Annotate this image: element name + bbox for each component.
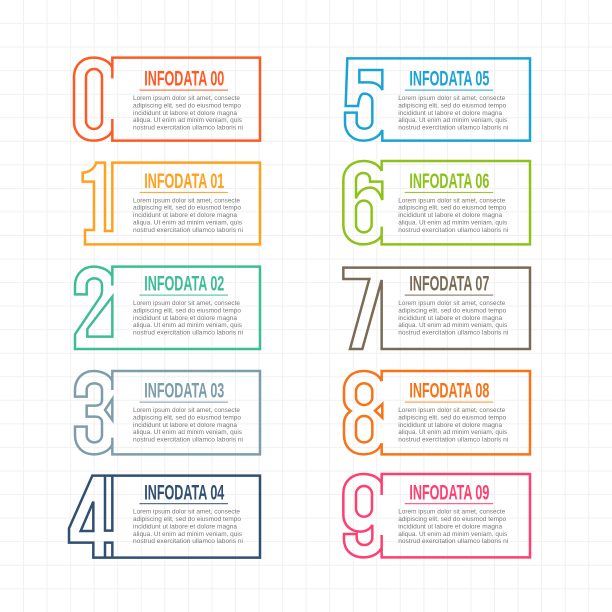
text: infodata 08: nostrud exercitation ullamco laboris ni — [398, 437, 509, 444]
number 4 and frame — [69, 476, 260, 558]
text: infodata 01: adipiscing elit, sed do eiusmod tempo — [133, 205, 241, 212]
text: infodata 04: nostrud exercitation ullamco laboris ni — [133, 538, 243, 545]
text: infodata 00 — [133, 68, 243, 132]
text: infodata 05: INFODATA 05 — [409, 68, 490, 91]
text: infodata 08: incididunt ut labore et dolore magna — [398, 422, 502, 429]
text: infodata 07: incididunt ut labore et dolore magna — [398, 315, 502, 322]
text: infodata 09: INFODATA 09 — [409, 481, 489, 504]
text: infodata 07: INFODATA 07 — [409, 273, 489, 296]
text: infodata 00: nostrud exercitation ullamco laboris ni — [133, 125, 243, 132]
text: infodata 02 — [133, 273, 243, 337]
number 2 and frame — [75, 267, 260, 349]
text: infodata 01: Lorem ipsum dolor sit amet, consecte — [133, 197, 240, 204]
number 5 and frame — [345, 58, 530, 141]
text: infodata 08: adipiscing elit, sed do eiusmod tempo — [398, 414, 506, 421]
text: infodata 07: aliqua. Ut enim ad minim veniam, quis — [398, 322, 508, 329]
text: infodata 09: incididunt ut labore et dolore magna — [398, 523, 502, 530]
text: infodata 01: INFODATA 01 — [144, 170, 224, 193]
panel: infodata 03 — [75, 371, 260, 454]
text: infodata 02: adipiscing elit, sed do eiusmod tempo — [133, 307, 241, 314]
text: infodata 06: incididunt ut labore et dolore magna — [398, 212, 502, 219]
text: infodata 05: adipiscing elit, sed do eiusmod tempo — [398, 102, 506, 109]
text: infodata 04 — [133, 481, 243, 545]
text: infodata 04: Lorem ipsum dolor sit amet, consecte — [133, 509, 240, 516]
number 8 and frame — [344, 371, 530, 454]
text: infodata 07: nostrud exercitation ullamco laboris ni — [398, 330, 509, 337]
text: infodata 06: INFODATA 06 — [409, 170, 489, 193]
text: infodata 02: incididunt ut labore et dolore magna — [133, 315, 237, 322]
text: infodata 05: incididunt ut labore et dolore magna — [398, 110, 502, 117]
panel: infodata 05 — [345, 58, 530, 141]
text: infodata 09: aliqua. Ut enim ad minim veniam, quis — [398, 531, 508, 538]
text: infodata 05: Lorem ipsum dolor sit amet, consecte — [398, 95, 505, 102]
text: infodata 08 — [398, 380, 509, 444]
panel: infodata 04 — [69, 476, 260, 558]
text: infodata 06: nostrud exercitation ullamco laboris ni — [398, 227, 509, 234]
number 1 and frame — [83, 163, 260, 244]
text: infodata 02: aliqua. Ut enim ad minim veniam, quis — [133, 322, 243, 329]
text: infodata 05: aliqua. Ut enim ad minim veniam, quis — [398, 117, 508, 124]
panel: infodata 09 — [343, 474, 530, 557]
text: infodata 05: nostrud exercitation ullamco laboris ni — [398, 125, 509, 132]
text: infodata 02: INFODATA 02 — [144, 273, 224, 296]
panel: infodata 00 — [74, 58, 260, 141]
text: infodata 04: INFODATA 04 — [144, 481, 224, 504]
number 0 and frame — [74, 58, 260, 141]
text: infodata 09: Lorem ipsum dolor sit amet, consecte — [398, 509, 505, 516]
text: infodata 03: INFODATA 03 — [144, 380, 224, 403]
panel: infodata 06 — [343, 161, 530, 244]
panel: infodata 07 — [343, 268, 530, 349]
text: infodata 01: incididunt ut labore et dolore magna — [133, 212, 237, 219]
text: infodata 03 — [133, 380, 243, 444]
text: infodata 04: incididunt ut labore et dolore magna — [133, 523, 237, 530]
text: infodata 00: Lorem ipsum dolor sit amet, consecte — [133, 95, 240, 102]
text: infodata 03: adipiscing elit, sed do eiusmod tempo — [133, 414, 241, 421]
text: infodata 05 — [398, 68, 509, 132]
text: infodata 09: nostrud exercitation ullamco laboris ni — [398, 538, 509, 545]
text: infodata 03: incididunt ut labore et dolore magna — [133, 422, 237, 429]
text: infodata 09 — [398, 481, 509, 545]
text: infodata 06: Lorem ipsum dolor sit amet, consecte — [398, 197, 505, 204]
text: infodata 03: nostrud exercitation ullamco laboris ni — [133, 437, 243, 444]
text: infodata 00: aliqua. Ut enim ad minim veniam, quis — [133, 117, 243, 124]
text: infodata 09: adipiscing elit, sed do eiusmod tempo — [398, 516, 506, 523]
number 7 and frame — [343, 268, 530, 349]
text: infodata 04: aliqua. Ut enim ad minim veniam, quis — [133, 531, 243, 538]
text: infodata 02: Lorem ipsum dolor sit amet, consecte — [133, 300, 240, 307]
text: infodata 04: adipiscing elit, sed do eiusmod tempo — [133, 516, 241, 523]
text: infodata 08: Lorem ipsum dolor sit amet, consecte — [398, 407, 505, 414]
text: infodata 08: aliqua. Ut enim ad minim veniam, quis — [398, 429, 508, 436]
text: infodata 03: aliqua. Ut enim ad minim veniam, quis — [133, 429, 243, 436]
text: infodata 06: adipiscing elit, sed do eiusmod tempo — [398, 205, 506, 212]
number 9 and frame — [343, 474, 530, 557]
text: infodata 01: nostrud exercitation ullamco laboris ni — [133, 227, 243, 234]
text: infodata 01 — [133, 170, 243, 234]
text: infodata 07: adipiscing elit, sed do eiusmod tempo — [398, 307, 506, 314]
panel: infodata 08 — [344, 371, 530, 454]
text: infodata 07 — [398, 273, 509, 337]
text: infodata 00: incididunt ut labore et dolore magna — [133, 110, 237, 117]
text: infodata 07: Lorem ipsum dolor sit amet, consecte — [398, 300, 505, 307]
text: infodata 02: nostrud exercitation ullamco laboris ni — [133, 330, 243, 337]
text: infodata 01: aliqua. Ut enim ad minim veniam, quis — [133, 220, 243, 226]
text: infodata 06: aliqua. Ut enim ad minim veniam, quis — [398, 220, 508, 226]
number 6 and frame — [343, 161, 530, 244]
panel: infodata 02 — [75, 267, 260, 349]
text: infodata 00: INFODATA 00 — [144, 68, 224, 91]
text: infodata 08: INFODATA 08 — [409, 380, 490, 403]
text: infodata 06 — [398, 170, 509, 234]
text: infodata 03: Lorem ipsum dolor sit amet, consecte — [133, 407, 240, 414]
text: infodata 00: adipiscing elit, sed do eiusmod tempo — [133, 102, 241, 109]
panel: infodata 01 — [83, 163, 260, 244]
number 3 and frame — [75, 371, 260, 454]
